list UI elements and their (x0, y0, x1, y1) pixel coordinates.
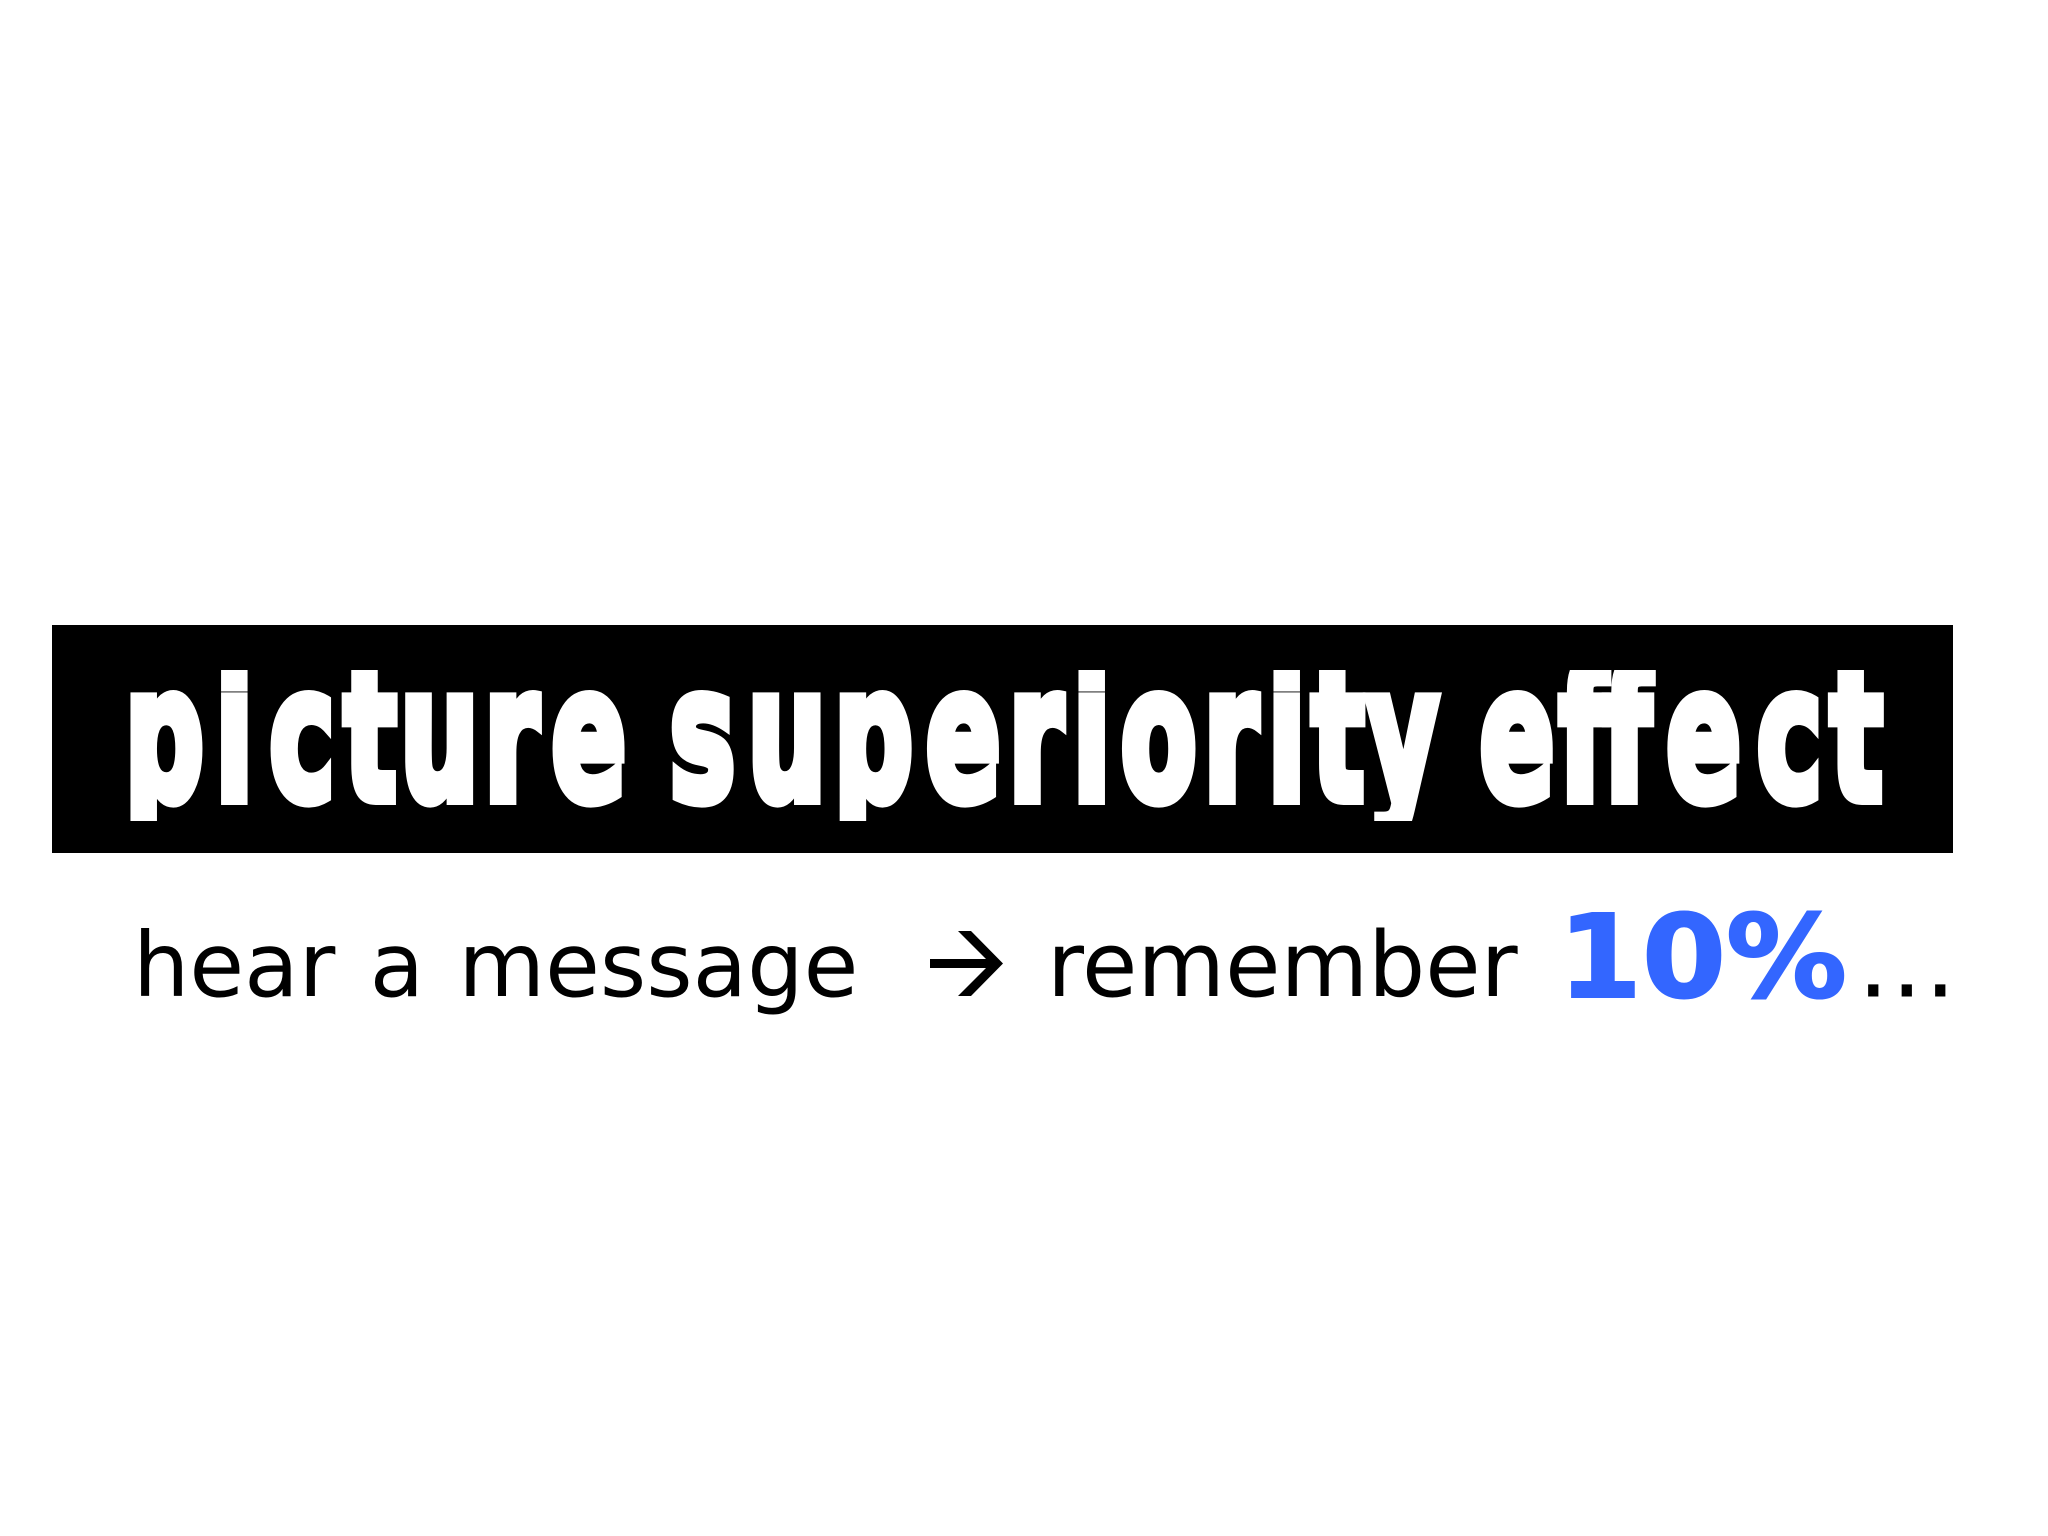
title text: picture superiority effect (125, 628, 1883, 843)
text: ellipsis: ... (1859, 913, 1955, 1018)
title banner (52, 625, 1953, 853)
text: 10% highlight: 10% (1558, 891, 1847, 1024)
icon: arrow (930, 931, 1003, 996)
subtitle line (133, 891, 1955, 1024)
text: remember: remember (1047, 913, 1518, 1018)
text: hear a message: hear a message (133, 913, 858, 1017)
